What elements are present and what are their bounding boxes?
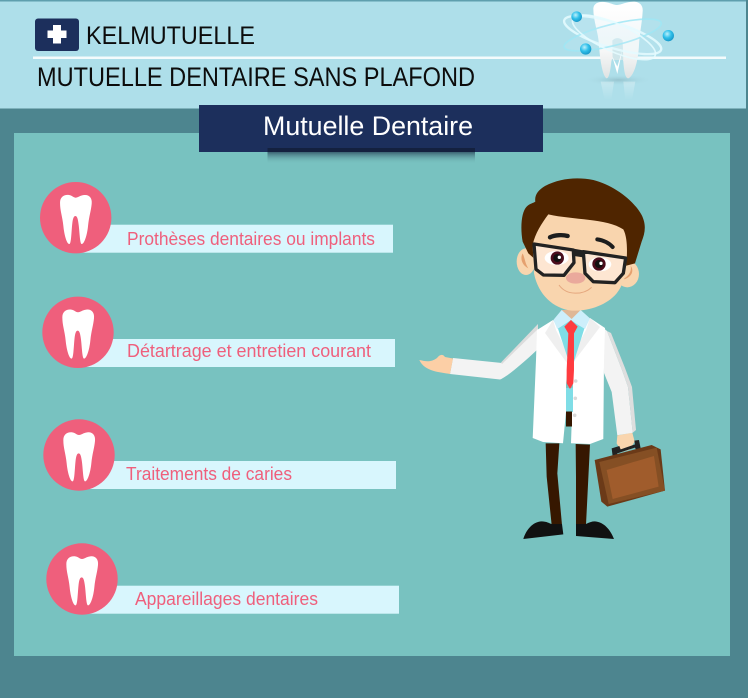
shirt and tie xyxy=(553,310,590,389)
title banner xyxy=(199,105,543,152)
pointing arm xyxy=(419,324,538,380)
list item: appareillages xyxy=(46,543,399,615)
icon: tooth with orbits xyxy=(561,2,674,100)
briefcase xyxy=(595,433,665,507)
title banner: Mutuelle Dentaire xyxy=(263,111,473,141)
head xyxy=(517,178,645,311)
list item: détartrage xyxy=(42,297,395,368)
list item: prothèses xyxy=(40,182,393,253)
icon: medical cross logo xyxy=(35,18,79,51)
title banner shadow xyxy=(268,148,475,164)
brand name: KELMUTUELLE xyxy=(86,22,255,50)
panel: header band xyxy=(0,0,746,108)
list item: appareillages: Appareillages dentaires xyxy=(135,589,318,609)
panel: main content xyxy=(14,133,730,656)
list item: caries xyxy=(43,419,396,491)
legs and shoes xyxy=(523,443,614,539)
lab coat xyxy=(533,318,605,444)
header divider line xyxy=(33,56,726,59)
list item: détartrage: Détartrage et entretien courant xyxy=(127,341,371,361)
illustration: dentist with briefcase xyxy=(419,178,665,539)
right sleeve xyxy=(600,325,636,435)
list item: prothèses: Prothèses dentaires ou implants xyxy=(127,229,375,249)
list item: caries: Traitements de caries xyxy=(126,464,292,484)
main heading: MUTUELLE DENTAIRE SANS PLAFOND xyxy=(37,62,475,92)
